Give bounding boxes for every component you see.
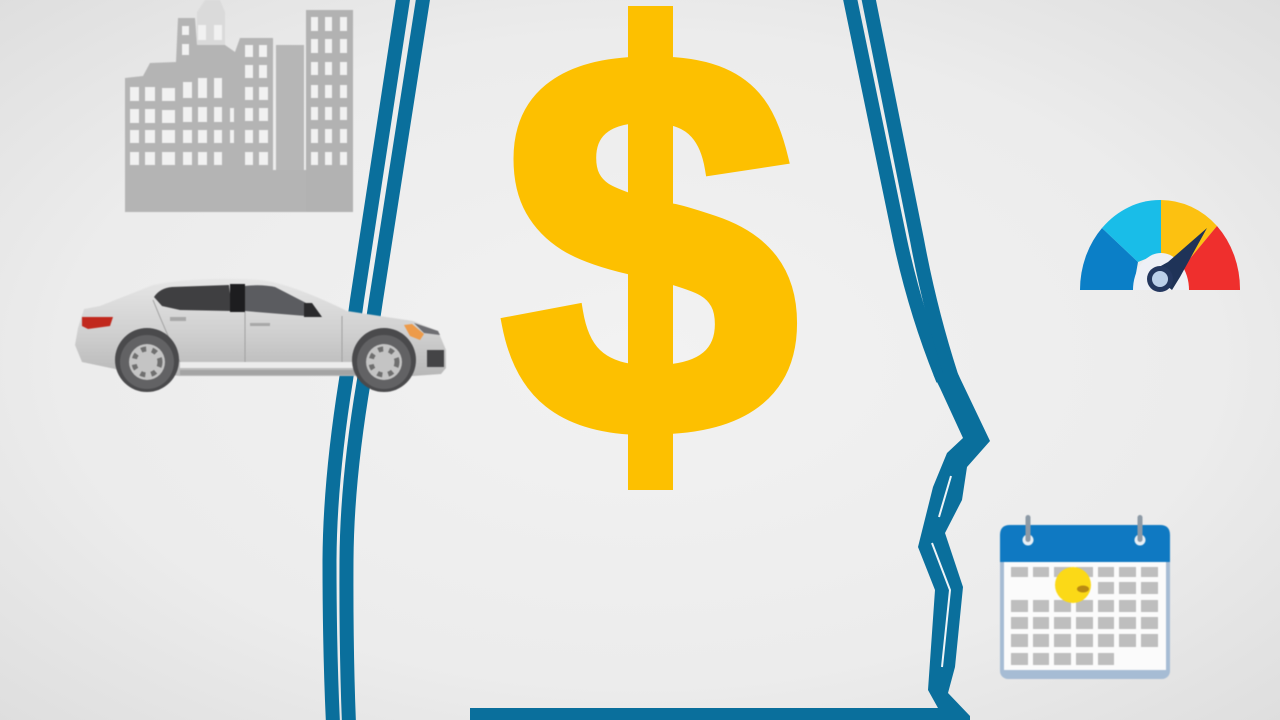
icon: silver car (75, 279, 446, 392)
back of head, outer line (330, 0, 404, 720)
icon: speedometer gauge (1080, 200, 1240, 292)
mouth highlights (932, 476, 951, 667)
nose, lips and chin (470, 375, 990, 720)
icon: calendar (1000, 515, 1170, 679)
head outline (330, 0, 990, 720)
face, right line (868, 0, 955, 385)
icon: city buildings (125, 0, 353, 212)
face, left line (850, 0, 943, 380)
back of head, inner line (346, 0, 424, 720)
